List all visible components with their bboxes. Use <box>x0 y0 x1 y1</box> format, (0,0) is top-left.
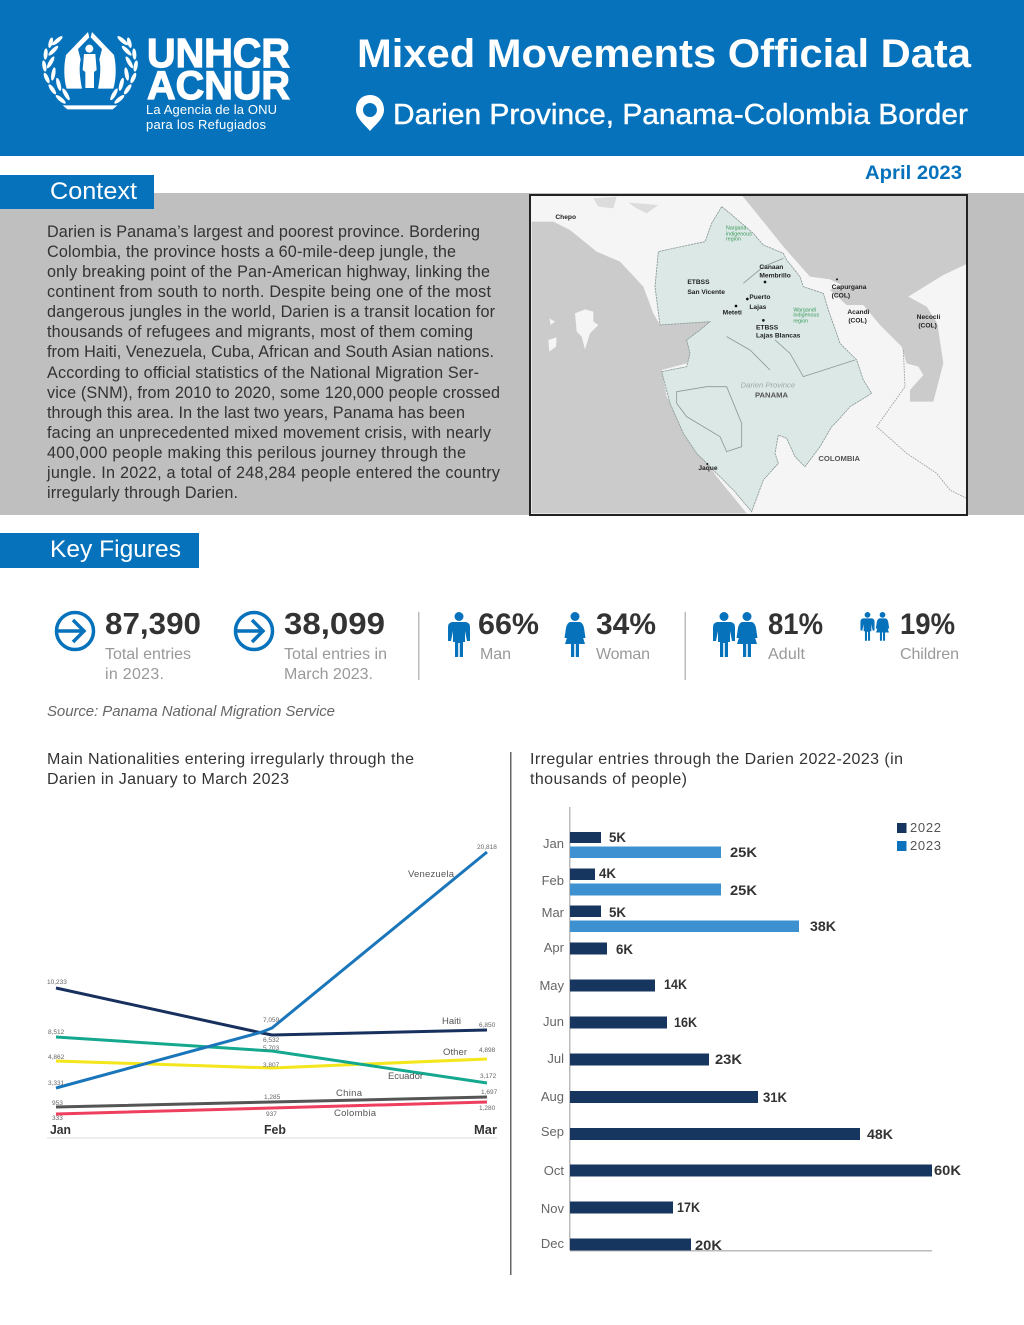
value labels: 5,703 <box>263 1045 280 1052</box>
legend: 2022 <box>910 820 941 835</box>
value labels: 3,172 <box>480 1073 497 1080</box>
map: Narganá <box>726 225 746 231</box>
value labels: 7,059 <box>263 1017 280 1024</box>
panel: context <box>0 175 1024 515</box>
map: labels: ETBSS <box>756 324 779 331</box>
stat: total entries 2023 <box>56 606 201 683</box>
value labels: 6,850 <box>479 1022 496 1029</box>
bar value labels: 60K <box>934 1162 961 1178</box>
stat: woman <box>564 608 656 663</box>
logo wordmark <box>146 30 290 132</box>
heading: context: Context <box>50 178 137 205</box>
map: labels: PANAMA <box>755 390 789 399</box>
stat: man: 66% <box>478 608 539 641</box>
context text block: vice (SNM), from 2010 to 2020, some 120,000 people crossed <box>47 384 500 402</box>
month labels: Feb <box>542 873 564 888</box>
value labels: 333 <box>52 1115 63 1122</box>
map: labels: (COL) <box>848 318 867 325</box>
bar value labels: 4K <box>599 865 616 881</box>
context text block: dangerous jungles in the world, Darien is a transit location for <box>47 303 496 321</box>
value labels: 4,898 <box>479 1047 496 1054</box>
map: labels <box>555 214 940 472</box>
stat: total entries March 2023: 38,099 <box>284 606 385 641</box>
value labels: 1,285 <box>264 1094 281 1101</box>
map: labels: San Vicente <box>687 289 725 296</box>
stat: total entries March 2023: March 2023. <box>284 666 373 683</box>
month labels: Apr <box>544 940 565 955</box>
context text block: continent from south to north. Despite being one of the most <box>47 283 492 301</box>
stat: children: Children <box>900 646 959 663</box>
icon: location pin <box>356 95 384 131</box>
map: labels: Puerto <box>749 294 770 301</box>
month labels: Dec <box>541 1236 564 1251</box>
map: indigenous <box>793 312 819 318</box>
map: labels: Acandi <box>847 309 870 316</box>
map: Wargandí <box>793 307 817 313</box>
context text block: Darien is Panama’s largest and poorest province. Bordering <box>47 223 480 241</box>
bar value labels: 48K <box>867 1126 893 1142</box>
map: labels: Lajas Blancas <box>756 333 801 340</box>
value labels: 8,512 <box>48 1029 65 1036</box>
bar chart title: thousands of people) <box>530 771 687 788</box>
stat: man <box>448 608 539 663</box>
axis labels: Feb <box>264 1123 286 1137</box>
context text block: through this area. In the last two years, Panama has been <box>47 404 465 422</box>
value labels: 1,280 <box>479 1105 496 1112</box>
logo wordmark: ACNUR <box>147 64 290 108</box>
value labels: 3,807 <box>263 1062 280 1069</box>
bar value labels: 5K <box>609 904 626 920</box>
line chart: nationalities <box>47 844 498 1139</box>
line chart title: Darien in January to March 2023 <box>47 771 289 788</box>
axis labels: Mar <box>474 1123 497 1137</box>
value labels: 937 <box>266 1111 277 1118</box>
month labels: Nov <box>541 1201 564 1216</box>
logo wordmark: para los Refugiados <box>146 117 266 132</box>
map: labels: Jaque <box>698 465 718 472</box>
value labels: 10,233 <box>47 979 67 986</box>
value labels: 1,697 <box>481 1089 498 1096</box>
stat: woman: Woman <box>596 646 650 663</box>
title: Mixed Movements Official Data <box>357 32 972 76</box>
map: labels: Canaan <box>759 264 783 271</box>
series: Venezuela <box>56 852 487 1088</box>
map: Darien province <box>655 207 872 512</box>
value labels: 6,532 <box>263 1037 280 1044</box>
context text block: irregularly through Darien. <box>47 484 238 502</box>
legend: 2023 <box>910 838 941 853</box>
source note: Source: Panama National Migration Service <box>47 703 335 720</box>
month labels: Jul <box>547 1051 564 1066</box>
heading: key figures <box>0 533 199 568</box>
bar value labels: 31K <box>763 1089 787 1105</box>
bar chart title <box>530 751 903 788</box>
stat: total entries March 2023 <box>235 606 387 683</box>
bar value labels: 25K <box>730 882 757 898</box>
bar value labels: 38K <box>810 918 836 934</box>
series: China <box>56 1097 487 1107</box>
map: Colombian river <box>877 350 967 498</box>
map: sea and neighbouring land <box>532 222 747 513</box>
heading: context <box>0 175 154 209</box>
axis labels: Jan <box>50 1123 71 1137</box>
bar value labels: 17K <box>677 1199 700 1215</box>
heading: key figures: Key Figures <box>50 536 181 563</box>
context text block: jungle. In 2022, a total of 248,284 people entered the country <box>46 464 501 482</box>
axis labels <box>50 1123 497 1137</box>
month labels: May <box>539 978 564 993</box>
map: region <box>793 319 808 325</box>
line chart title <box>47 751 414 788</box>
month labels: Jan <box>543 836 564 851</box>
logo wordmark: UNHCR <box>147 30 290 76</box>
subtitle: Darien Province, Panama-Colombia Border <box>393 99 968 131</box>
stat: adult: Adult <box>768 646 806 663</box>
series labels: Colombia <box>334 1108 377 1119</box>
map <box>530 195 967 515</box>
context text block: According to official statistics of the National Migration Ser- <box>47 364 479 382</box>
header banner <box>0 0 1024 156</box>
stat: total entries 2023: 87,390 <box>105 606 201 641</box>
logo wordmark: La Agencia de la ONU <box>146 102 277 117</box>
series: Other <box>56 1059 487 1068</box>
panel: key figures <box>56 606 959 683</box>
month labels <box>539 836 565 1251</box>
map: labels: (COL) <box>918 322 937 329</box>
month labels: Jun <box>543 1014 564 1029</box>
map: labels: Necocli <box>917 314 940 321</box>
bar value labels: 14K <box>664 976 687 992</box>
bar value labels: 6K <box>616 941 633 957</box>
icon: UNHCR logo emblem <box>41 32 139 109</box>
map: indigenous <box>726 232 752 238</box>
map: labels: Meteti <box>723 309 742 316</box>
value labels: 3,331 <box>48 1080 65 1087</box>
value labels <box>47 844 498 1122</box>
month labels: Mar <box>542 905 565 920</box>
stat: adult: 81% <box>768 608 823 641</box>
month labels: Oct <box>544 1163 564 1178</box>
context text block: from Haiti, Venezuela, Cuba, African and South Asian nations. <box>47 343 494 361</box>
map: labels: ETBSS <box>687 279 710 286</box>
series: Colombia <box>56 1102 487 1114</box>
stat: total entries March 2023: Total entries in <box>284 646 387 663</box>
map: labels: Lajas <box>749 304 767 311</box>
context text block: only breaking point of the Pan-American highway, linking the <box>47 263 490 281</box>
value labels: 20,818 <box>477 844 497 851</box>
series labels <box>334 869 467 1119</box>
month labels: Aug <box>541 1089 564 1104</box>
map: labels: COLOMBIA <box>818 454 860 463</box>
series: Haiti <box>56 988 487 1035</box>
legend <box>897 820 941 853</box>
stat: adult <box>713 608 823 663</box>
map: region <box>726 237 741 243</box>
context text block <box>46 223 501 502</box>
value labels: 953 <box>52 1100 63 1107</box>
bar value labels <box>599 829 961 1253</box>
value labels: 4,862 <box>48 1054 65 1061</box>
date: April 2023 <box>865 163 962 184</box>
map: labels: (COL) <box>832 292 850 299</box>
bar chart title: Irregular entries through the Darien 2022-2023 (in <box>530 751 903 768</box>
stat: children <box>860 608 959 663</box>
series: Ecuador <box>56 1037 487 1083</box>
stat: total entries 2023: in 2023. <box>105 666 164 683</box>
series labels: Other <box>443 1047 467 1058</box>
map: labels: Capurgana <box>832 284 867 291</box>
stat: total entries 2023: Total entries <box>105 646 191 663</box>
bar value labels: 16K <box>674 1014 697 1030</box>
map: labels: Darien Province <box>741 381 795 390</box>
series labels: China <box>336 1088 363 1099</box>
line chart title: Main Nationalities entering irregularly through the <box>47 751 414 768</box>
bar value labels: 23K <box>715 1051 742 1067</box>
bar value labels: 25K <box>730 844 757 860</box>
series labels: Ecuador <box>388 1071 423 1082</box>
stat: woman: 34% <box>596 608 656 641</box>
bars <box>570 832 932 1250</box>
bar value labels: 5K <box>609 829 626 845</box>
stat: man: Man <box>480 646 511 663</box>
context text block: thousands of refugees and migrants, most of them coming <box>47 323 473 341</box>
bar value labels: 20K <box>695 1237 722 1253</box>
context text block: 400,000 people making this perilous journey through the <box>47 444 466 462</box>
series labels: Haiti <box>442 1016 461 1027</box>
month labels: Sep <box>541 1124 564 1139</box>
bar chart: irregular entries <box>539 807 961 1253</box>
stat: children: 19% <box>900 608 955 641</box>
map: labels: Membrillo <box>759 272 791 279</box>
context text block: Colombia, the province hosts a 60-mile-deep jungle, the <box>47 243 456 261</box>
context text block: facing an unprecedented mixed movement crisis, with nearly <box>47 424 492 442</box>
series labels: Venezuela <box>408 869 455 880</box>
map: labels: Chepo <box>555 214 576 221</box>
